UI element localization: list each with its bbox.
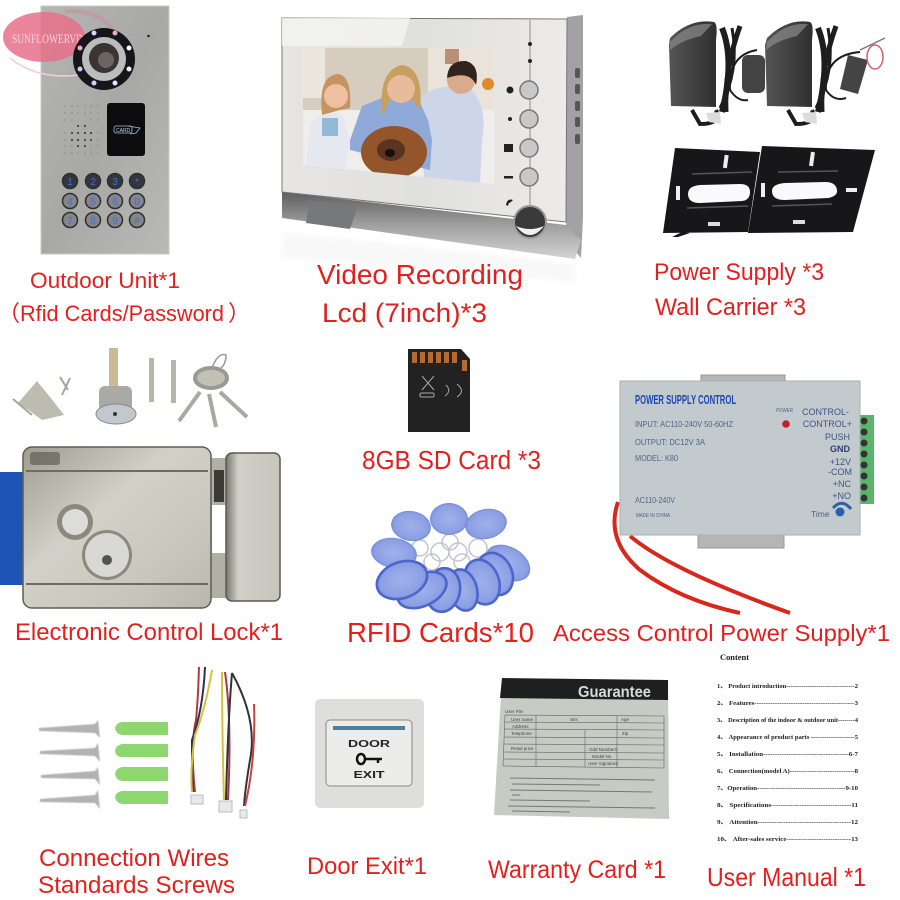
user manual contents: 10、 After-sales service----------------------------13 [717, 837, 858, 843]
form field labels: Odd Numbers [589, 747, 618, 752]
screws and anchors [39, 720, 168, 809]
box specs: MADE IN CHINA [636, 513, 671, 519]
form field labels: User Signature [588, 761, 619, 766]
keypad: 0 [134, 197, 140, 208]
label: outdoor unit: Outdoor Unit*1 [30, 268, 180, 293]
adapter 1 [669, 21, 765, 124]
label: power supply and wall carrier: Power Supply *3 [654, 259, 824, 286]
label: video recording [317, 259, 523, 328]
box specs: MODEL: K80 [635, 453, 678, 463]
label: SD card: 8GB SD Card *3 [362, 447, 541, 475]
keypad: 6 [112, 197, 118, 208]
lower bezel [282, 192, 581, 259]
box heading: POWER SUPPLY CONTROL [635, 393, 736, 407]
monitor icons [504, 42, 532, 206]
door exit button [315, 699, 424, 808]
terminal labels: GND [830, 444, 850, 454]
label: connection wires and screws [38, 845, 235, 899]
terminal labels: +NO [832, 491, 851, 501]
label: warranty card: Warranty Card *1 [488, 856, 666, 884]
indoor monitor [282, 15, 583, 282]
guarantee heading: Guarantee [578, 684, 651, 701]
monitor side frame [566, 15, 583, 258]
label: connection wires and screws: Standards Screws [38, 872, 235, 899]
latch bridge [205, 458, 235, 598]
form field labels: Model No [592, 754, 612, 759]
SD markings [420, 376, 462, 397]
watermark: sunflower logo: SUNFLOWERVD [12, 32, 83, 46]
screws [149, 358, 176, 403]
push button [57, 504, 93, 540]
keypad: 5 [90, 197, 96, 208]
carrier 1 [663, 148, 760, 237]
electronic lock [0, 447, 280, 608]
user manual contents: 2、 Features--------------------------------------------3 [717, 701, 858, 707]
user manual contents: 8、 Specifications----------------------------------11 [717, 803, 858, 809]
wall carriers [663, 146, 875, 237]
side buttons [575, 68, 580, 144]
lock cylinder [96, 348, 136, 424]
user manual contents: 7、Operation---------------------------------------9-10 [717, 786, 858, 792]
form field labels: Age [621, 717, 630, 722]
user manual contents: 6、 Connection(model A)-----------------------------8 [717, 768, 858, 775]
user manual contents: 1、 Product introduction--------------------------------2 [717, 684, 858, 690]
strike plate [13, 377, 70, 420]
watermark: sunflower logo [3, 11, 113, 76]
key rings [412, 534, 487, 570]
user manual contents: 9、 Attention----------------------------------------12 [717, 820, 858, 826]
front face [282, 18, 567, 222]
SD card [408, 349, 470, 432]
keypad: 7 [67, 216, 73, 227]
keypad: # [134, 216, 140, 227]
power LED [782, 420, 790, 428]
door exit button: DOOR [348, 739, 391, 750]
dog [361, 126, 427, 178]
father [420, 86, 484, 185]
wire connectors [191, 795, 247, 818]
RFID reader window [107, 103, 145, 156]
label: user manual: User Manual *1 [707, 862, 866, 892]
box specs: POWER [776, 408, 793, 414]
label: access control power supply: Access Control Power Supply*1 [553, 620, 890, 646]
SD contacts [412, 352, 467, 371]
user manual contents [717, 652, 858, 843]
form field labels: Telephone [511, 731, 532, 736]
label: outdoor unit [0, 268, 250, 326]
key cylinder [82, 530, 132, 580]
user manual contents: 4、 Appearance of product parts --------------------5 [717, 735, 858, 741]
keypad: 8 [90, 216, 96, 227]
form field labels: Zip [622, 731, 629, 736]
outdoor unit panel [3, 6, 169, 254]
form field labels: User File [505, 709, 523, 714]
form field labels: Sex [570, 717, 579, 722]
terminal labels: PUSH [825, 432, 850, 442]
power adapters [669, 21, 885, 124]
key icon [357, 754, 382, 764]
label: power supply and wall carrier [654, 259, 824, 321]
label: power supply and wall carrier: Wall Carrier *3 [655, 294, 806, 321]
label: video recording: Video Recording [317, 259, 523, 290]
user manual contents: 5、 Installation-------------------------------------6-7 [717, 752, 858, 758]
box specs: AC110-240V [635, 495, 675, 505]
monitor buttons [520, 81, 538, 186]
warranty card [494, 678, 669, 819]
keypad: 3 [112, 177, 118, 188]
box specs [635, 408, 793, 519]
RFID reader window: CARD [116, 128, 131, 134]
label: RFID cards: RFID Cards*10 [347, 617, 534, 648]
manual heading: Content [720, 652, 749, 662]
warranty notes [508, 778, 655, 812]
keypad [62, 174, 144, 228]
form field labels: Retail price [511, 746, 534, 751]
form field labels: Address [512, 724, 529, 729]
box specs: OUTPUT: DC12V 3A [635, 437, 705, 447]
screen photo: family [303, 48, 494, 185]
keypad: 1 [67, 177, 73, 188]
label: door exit: Door Exit*1 [307, 853, 427, 880]
terminal labels: CONTROL+ [803, 419, 852, 429]
terminal labels: -COM [828, 467, 852, 477]
mother [350, 98, 432, 170]
strike block [226, 453, 280, 601]
carrier 2 [748, 146, 875, 233]
terminal labels [802, 407, 852, 501]
keypad: 2 [90, 177, 96, 188]
keypad: * [135, 177, 139, 188]
mounting brackets [698, 375, 785, 548]
screws [39, 720, 100, 809]
label: outdoor unit: ） [228, 301, 250, 326]
speaker grille [64, 105, 99, 154]
label: electronic control lock: Electronic Control Lock*1 [15, 619, 283, 646]
terminal labels: +NC [833, 479, 851, 489]
blue strap [0, 472, 24, 585]
form table [503, 715, 664, 768]
lock hardware parts [13, 348, 247, 427]
keys [179, 355, 247, 427]
label: connection wires and screws: Connection Wires [39, 845, 229, 872]
green anchors [115, 722, 168, 804]
form field labels: User name [511, 717, 534, 722]
lock body [23, 447, 211, 608]
camera ring [73, 28, 135, 90]
time adjust icon: Time [811, 509, 830, 519]
keypad: 9 [112, 216, 118, 227]
label: video recording: Lcd (7inch)*3 [322, 298, 487, 328]
red wires [614, 502, 790, 613]
label: outdoor unit: Rfid Cards/Password [20, 301, 224, 326]
box specs: INPUT: AC110-240V 50-60HZ [635, 419, 733, 429]
terminal labels: CONTROL- [802, 407, 849, 417]
time adjust icon [811, 503, 851, 519]
handset button [514, 206, 546, 238]
adapter 2 [765, 21, 885, 124]
control box [620, 381, 860, 535]
monitor reflection [282, 232, 575, 282]
back tags [369, 503, 537, 589]
door exit button: EXIT [354, 770, 384, 781]
front tags [371, 547, 520, 615]
terminal block [860, 415, 874, 504]
access control power supply [614, 375, 874, 613]
girl [306, 113, 350, 170]
form field labels [505, 709, 630, 766]
user manual contents: 3、 Description of the indoor & outdoor unit--------4 [717, 718, 858, 724]
terminal labels: +12V [830, 457, 851, 467]
connection wires [191, 667, 254, 818]
keypad: 4 [67, 197, 73, 208]
RFID key tags [369, 503, 537, 615]
